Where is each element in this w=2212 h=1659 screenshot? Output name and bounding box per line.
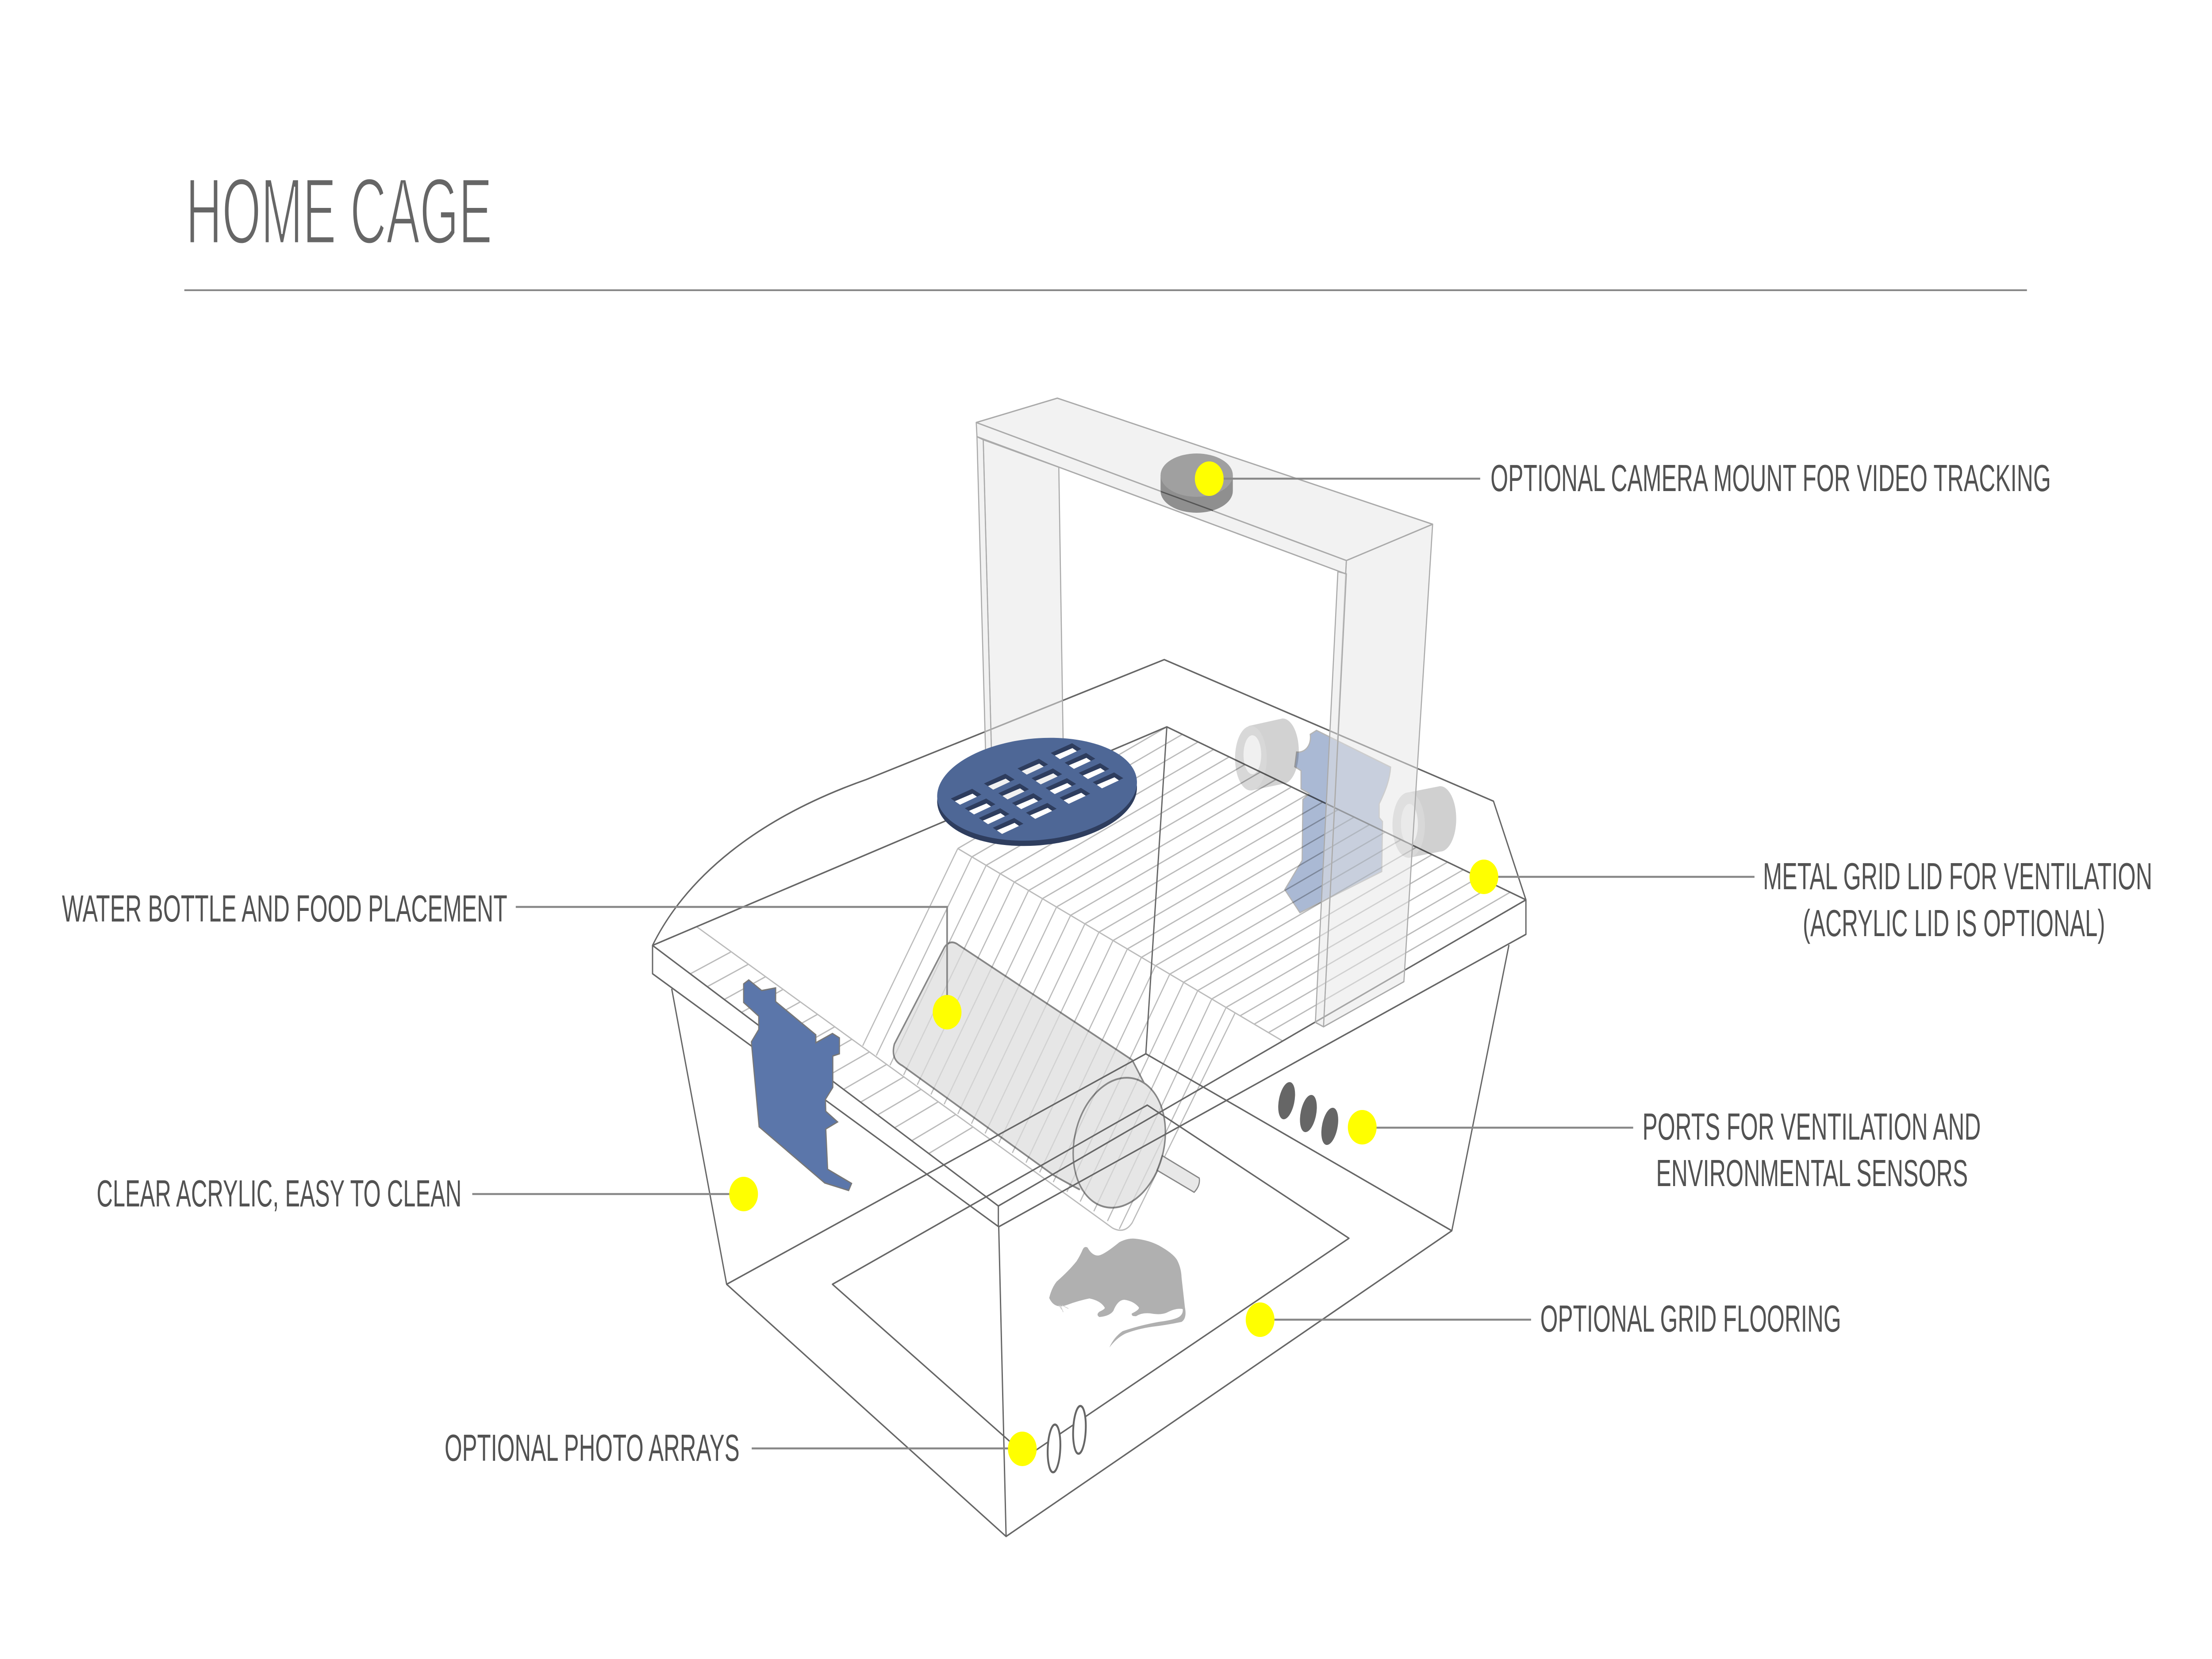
callout: ports: PORTS FOR VENTILATION AND <box>1643 1106 1981 1148</box>
callout: grid flooring: OPTIONAL GRID FLOORING <box>1540 1298 1841 1340</box>
grid lid hatching <box>691 727 1510 1230</box>
callout: photo arrays: OPTIONAL PHOTO ARRAYS <box>445 1427 740 1469</box>
water bottle spout <box>1157 1156 1199 1192</box>
illustration: home cage <box>653 398 1526 1536</box>
callout: ports: ENVIRONMENTAL SENSORS <box>1656 1152 1968 1194</box>
rear cylinders <box>1235 718 1456 858</box>
mouse <box>1049 1239 1186 1348</box>
blue front bracket <box>744 980 852 1190</box>
callout: clear acrylic: CLEAR ACRYLIC, EASY TO CLEAN <box>96 1172 461 1214</box>
callout: photo arrays <box>445 1427 1037 1469</box>
title rule <box>184 289 2027 291</box>
blue rear bracket <box>1285 730 1390 913</box>
callout: grid flooring <box>1246 1298 1841 1340</box>
camera <box>1160 453 1233 513</box>
ventilation grate disk <box>934 730 1140 854</box>
callout: water bottle and food <box>62 887 961 1029</box>
callout: camera mount <box>1195 457 2051 499</box>
callout: water bottle and food: WATER BOTTLE AND FOOD PLACEMENT <box>62 887 507 929</box>
water bottle <box>893 942 1182 1225</box>
cage body and lid outlines <box>653 660 1526 1536</box>
title: HOME CAGE <box>186 159 492 264</box>
callout: ports <box>1348 1106 1981 1194</box>
camera mount arch <box>976 398 1432 1027</box>
callout: metal grid lid: (ACRYLIC LID IS OPTIONAL) <box>1803 902 2105 944</box>
ventilation ports <box>1275 1080 1341 1147</box>
callout: metal grid lid <box>1470 855 2152 944</box>
photo array rings <box>1047 1406 1087 1473</box>
